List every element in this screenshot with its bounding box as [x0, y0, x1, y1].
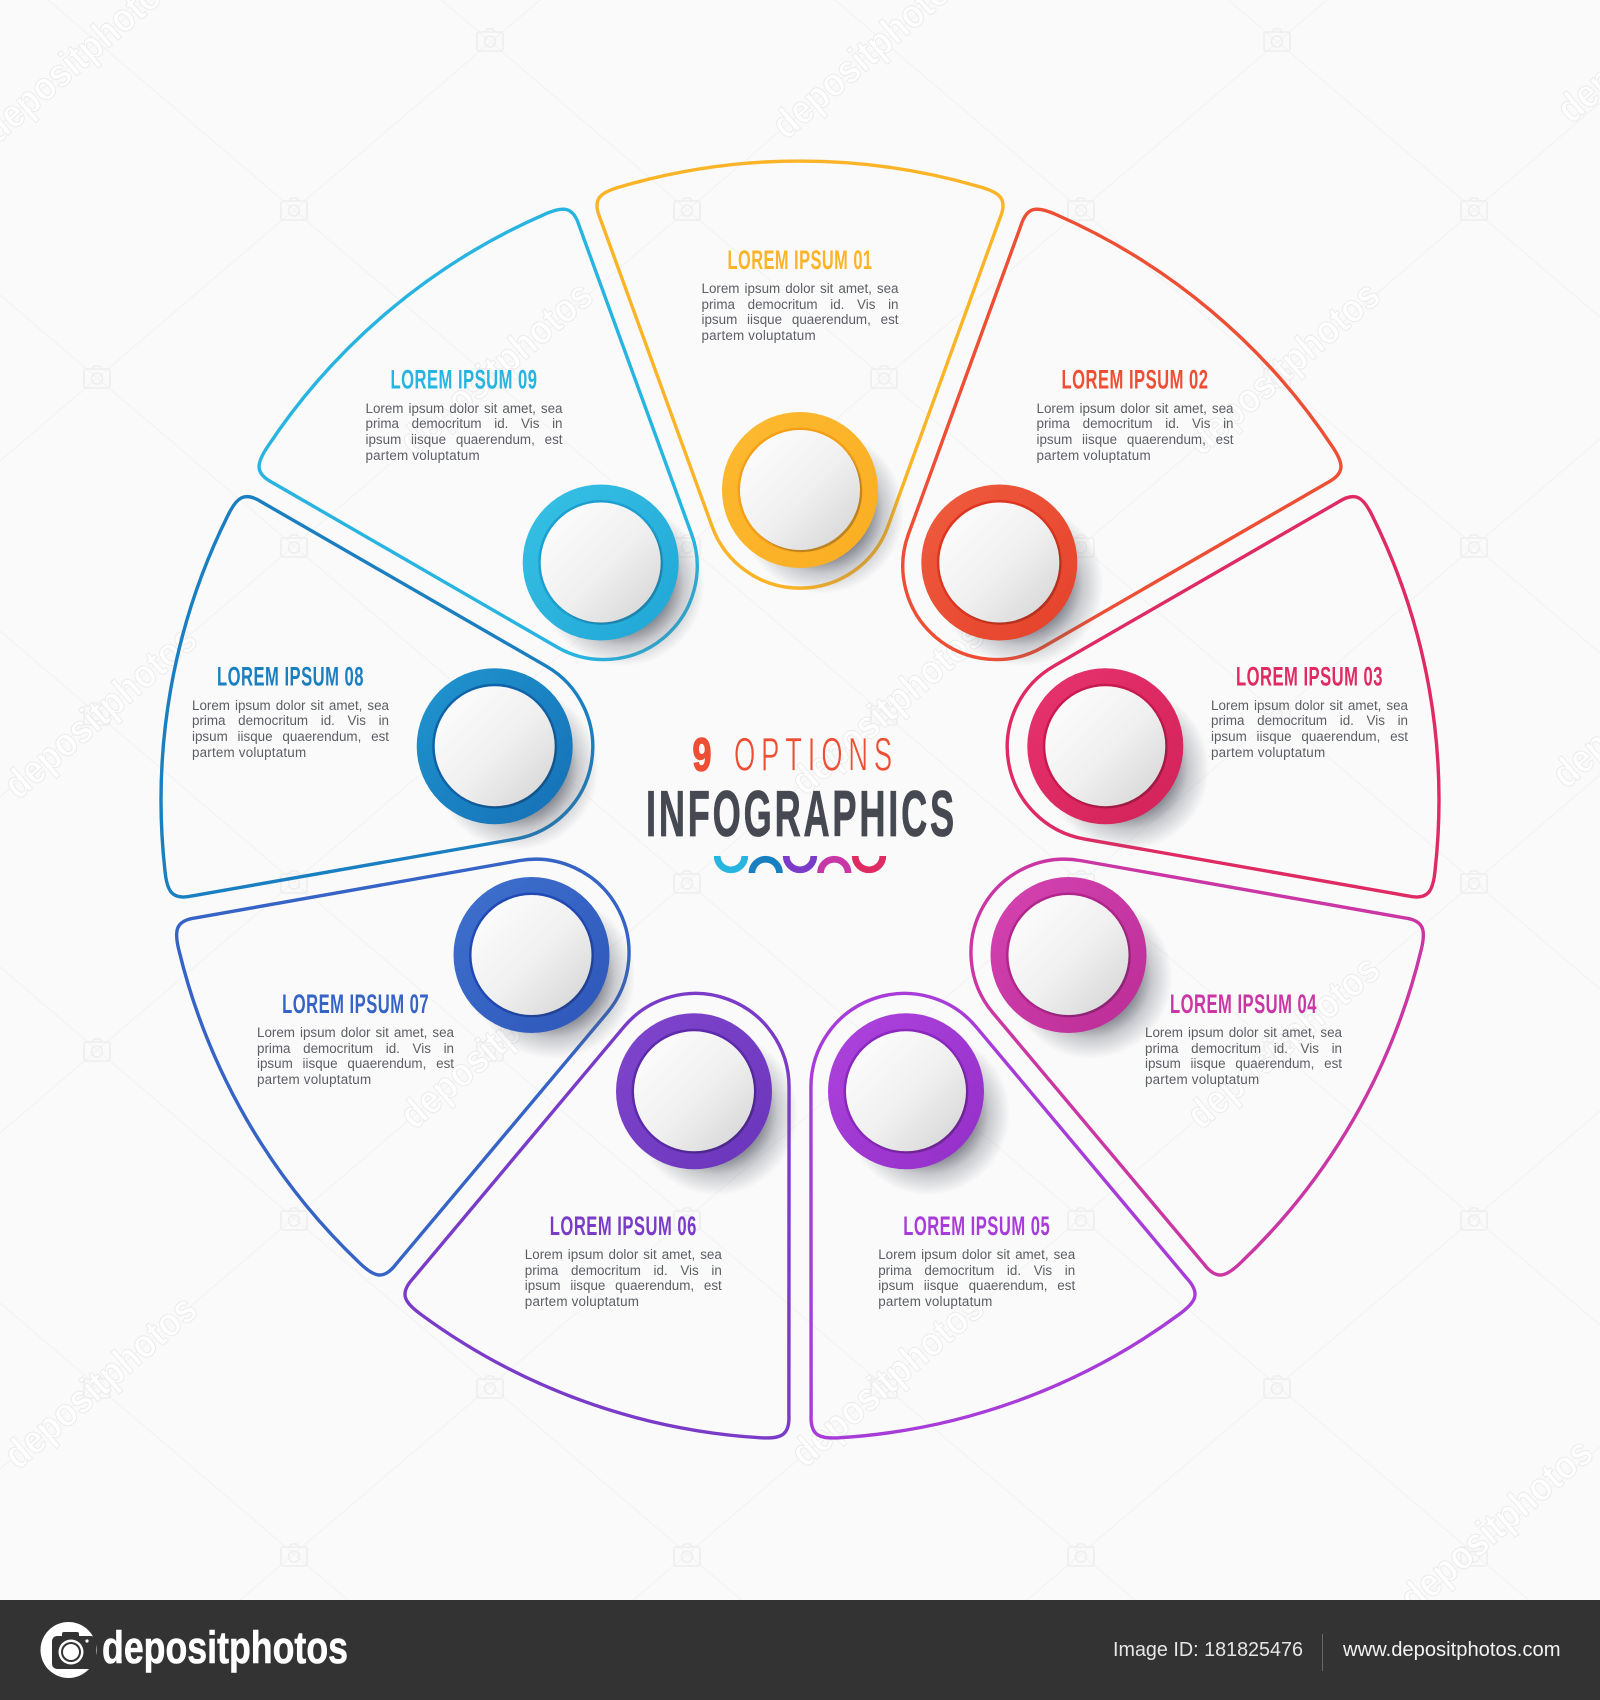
center title	[646, 728, 957, 873]
panel: option 02	[781, 180, 1366, 768]
knob: option 07	[454, 877, 636, 1059]
outline: option 09	[234, 180, 819, 768]
text: option 02: partem voluptatum	[1036, 448, 1151, 463]
text: option 04: partem voluptatum	[1145, 1072, 1259, 1087]
knob: option 04	[990, 877, 1172, 1059]
text: option 06: partem voluptatum	[525, 1294, 639, 1309]
text: option 06: ipsum iisque quaerendum, est	[525, 1278, 722, 1293]
website: www.depositphotos.com	[1342, 1639, 1560, 1661]
heading: option 03: LOREM IPSUM 03	[1236, 662, 1383, 692]
watermark pattern: depositphotos	[1178, 947, 1388, 1138]
heading: option 06: LOREM IPSUM 06	[550, 1211, 697, 1241]
text: option 02: prima democritum id. Vis in	[1036, 416, 1234, 431]
title: infographics: INFOGRAPHICS	[646, 778, 957, 850]
outline: option 02	[781, 180, 1366, 768]
text: option 08: ipsum iisque quaerendum, est	[192, 729, 389, 744]
knob: option 08	[417, 668, 599, 850]
heading: option 08: LOREM IPSUM 08	[217, 662, 364, 692]
watermark pattern: depositphotos	[782, 1285, 992, 1476]
watermark pattern: depositphotos	[0, 1287, 205, 1478]
knob: option 06	[616, 1013, 798, 1195]
text: option 09: partem voluptatum	[366, 448, 480, 463]
knob: option 05	[828, 1013, 1010, 1195]
outline: option 08	[135, 489, 627, 963]
text: option 05: ipsum iisque quaerendum, est	[878, 1278, 1075, 1293]
panel: option 09	[234, 180, 819, 768]
text: option 03: prima democritum id. Vis in	[1211, 713, 1408, 728]
decorative arcs	[717, 856, 883, 873]
text: option 07: partem voluptatum	[257, 1072, 371, 1087]
text: option 02: Lorem ipsum dolor sit amet, sea	[1036, 400, 1234, 416]
text: option 03	[1211, 698, 1411, 764]
text: option 08	[192, 698, 392, 764]
text: option 09: ipsum iisque quaerendum, est	[366, 432, 562, 447]
knob: option 01	[722, 412, 904, 594]
text: option 03: partem voluptatum	[1211, 745, 1325, 760]
watermark pattern: depositphotos	[391, 947, 601, 1138]
text: option 07	[257, 1025, 457, 1091]
text: option 01: prima democritum id. Vis in	[702, 297, 898, 312]
panel: option 07	[145, 730, 718, 1295]
text: option 07: ipsum iisque quaerendum, est	[257, 1056, 454, 1071]
text: option 05: partem voluptatum	[878, 1294, 992, 1309]
panel: option 04	[882, 730, 1455, 1295]
text: option 08: prima democritum id. Vis in	[192, 713, 389, 728]
text: option 07: prima democritum id. Vis in	[257, 1041, 454, 1056]
heading: option 07: LOREM IPSUM 07	[282, 989, 429, 1019]
text: option 02	[1036, 400, 1236, 466]
text: option 02: ipsum iisque quaerendum, est	[1036, 432, 1234, 447]
outline: option 07	[145, 730, 718, 1295]
text: option 08: Lorem ipsum dolor sit amet, sea	[192, 698, 389, 712]
panel: option 01	[597, 161, 1003, 594]
text: option 05: prima democritum id. Vis in	[878, 1263, 1075, 1278]
outline: option 05	[682, 930, 1209, 1470]
heading: option 04: LOREM IPSUM 04	[1170, 989, 1317, 1019]
outline: option 04	[882, 730, 1455, 1295]
watermark pattern: depositphotos	[782, 613, 992, 804]
text: option 06: Lorem ipsum dolor sit amet, sea	[525, 1247, 722, 1262]
text: option 06	[525, 1247, 725, 1313]
watermark pattern: depositphotos	[1178, 273, 1388, 464]
panel: option 03	[973, 489, 1465, 963]
text: option 04: prima democritum id. Vis in	[1145, 1041, 1342, 1056]
text: option 04	[1145, 1025, 1345, 1091]
heading: option 02: LOREM IPSUM 02	[1062, 364, 1208, 394]
text: option 03: Lorem ipsum dolor sit amet, sea	[1211, 698, 1408, 712]
text: option 03: ipsum iisque quaerendum, est	[1211, 729, 1408, 744]
outline: option 01	[597, 161, 1003, 588]
text: option 09	[366, 400, 566, 466]
watermark pattern: depositphotos	[391, 273, 601, 464]
knob: option 02	[921, 484, 1103, 666]
text: option 01	[702, 281, 902, 347]
text: option 07: Lorem ipsum dolor sit amet, sea	[257, 1025, 454, 1040]
text: option 01: Lorem ipsum dolor sit amet, sea	[702, 281, 898, 296]
logo wordmark: depositphotos	[102, 1622, 348, 1673]
knob: option 09	[523, 484, 705, 666]
footer bar	[0, 1600, 1600, 1700]
text: option 08: partem voluptatum	[192, 745, 306, 760]
text: option 09: prima democritum id. Vis in	[366, 416, 562, 431]
heading: option 09: LOREM IPSUM 09	[390, 364, 538, 394]
watermark pattern: depositphotos	[0, 617, 205, 808]
outline: option 06	[391, 930, 918, 1470]
text: option 01: ipsum iisque quaerendum, est	[702, 312, 898, 327]
text: option 01: partem voluptatum	[702, 328, 816, 343]
title: number 9: 9	[692, 728, 712, 780]
knob: option 03	[1027, 668, 1209, 850]
panel: option 06	[391, 930, 918, 1470]
text: option 05	[878, 1247, 1078, 1313]
heading: option 01: LOREM IPSUM 01	[728, 245, 872, 275]
text: option 05: Lorem ipsum dolor sit amet, sea	[878, 1247, 1075, 1262]
image id: Image ID: 181825476	[1113, 1639, 1303, 1661]
icon: camera logo	[40, 1622, 96, 1678]
outline: option 03	[973, 489, 1465, 963]
heading: option 05: LOREM IPSUM 05	[903, 1211, 1050, 1241]
panel: option 05	[682, 930, 1209, 1470]
panel: option 08	[135, 489, 627, 963]
text: option 04: ipsum iisque quaerendum, est	[1145, 1056, 1342, 1071]
text: option 06: prima democritum id. Vis in	[525, 1263, 722, 1278]
text: option 04: Lorem ipsum dolor sit amet, sea	[1145, 1025, 1342, 1040]
title: options: OPTIONS	[734, 728, 898, 780]
text: option 09: Lorem ipsum dolor sit amet, sea	[366, 400, 562, 416]
